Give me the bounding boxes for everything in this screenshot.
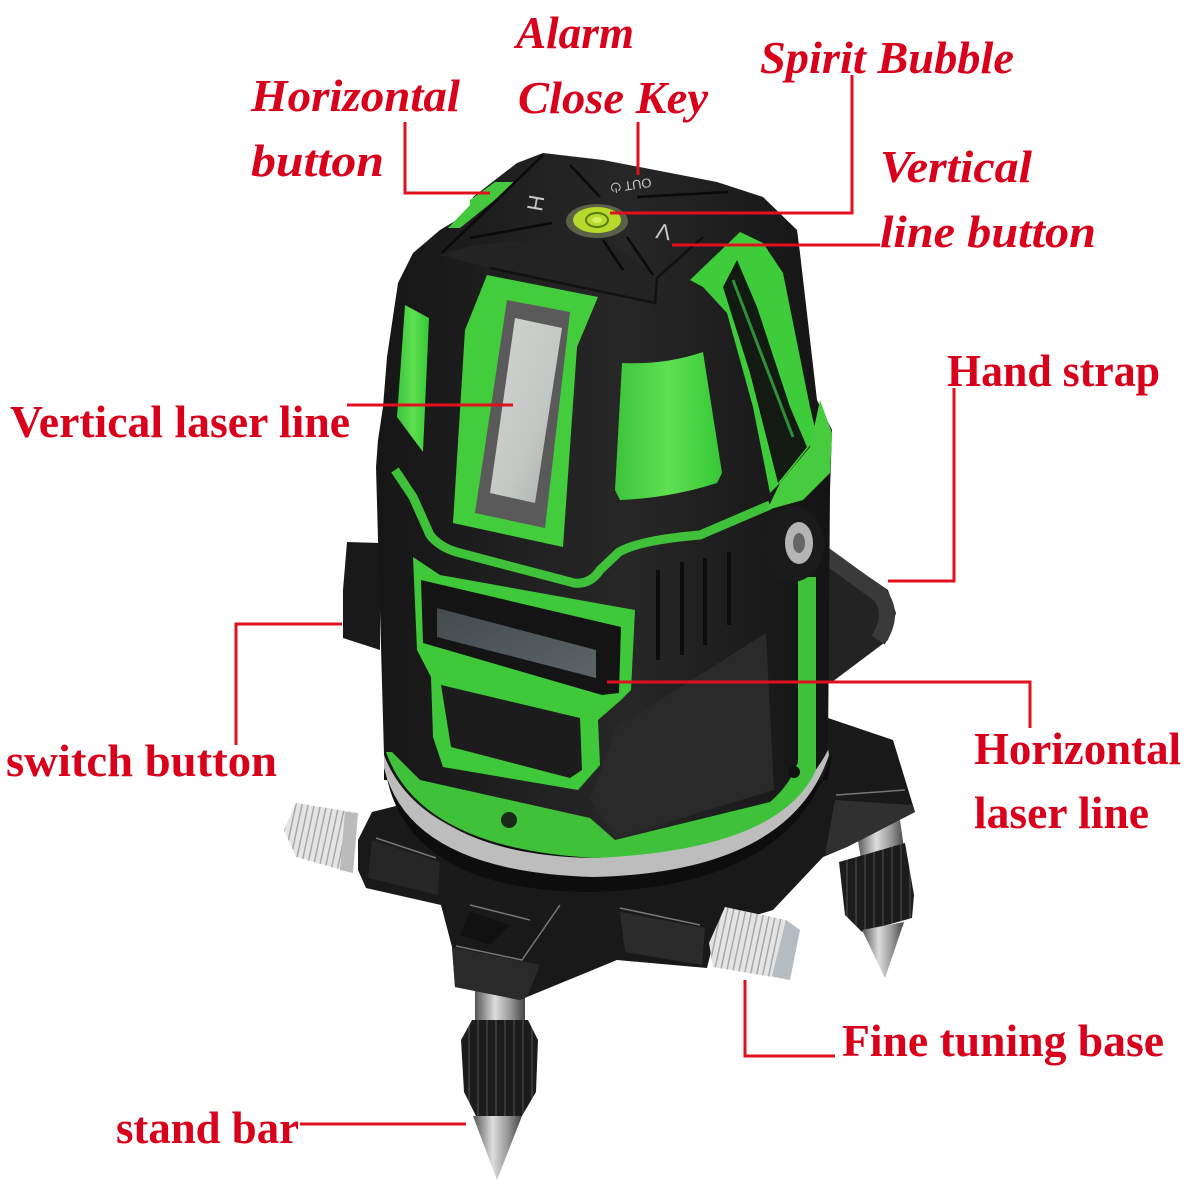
top cap detail	[440, 155, 728, 303]
leader lines	[236, 75, 1030, 1124]
label: alarm close key: Close Key	[518, 72, 709, 123]
switch knob	[343, 542, 380, 650]
label: fine tuning base: Fine tuning base	[842, 1015, 1164, 1066]
stand bar left	[461, 990, 538, 1180]
button H label: H	[522, 193, 549, 213]
right green panel	[615, 352, 722, 500]
green bottom band	[386, 577, 816, 858]
horizontal laser surround	[413, 557, 635, 790]
label: horizontal button: Horizontal	[250, 70, 460, 121]
label: horizontal laser line: Horizontal	[974, 723, 1181, 774]
hand strap	[815, 540, 896, 682]
housing screws	[501, 766, 800, 828]
ribs on lower housing	[658, 552, 729, 660]
horizontal laser glass	[437, 608, 596, 678]
stand bar right	[839, 820, 914, 978]
label: vertical line button	[880, 141, 1096, 257]
alarm key label: OUT ⏻	[610, 175, 652, 196]
laser level device	[284, 153, 915, 1180]
label: horizontal button	[250, 70, 460, 186]
green tab behind horizontal button	[448, 182, 517, 228]
body	[376, 153, 832, 857]
right side green window	[690, 232, 817, 493]
label: vertical laser line: Vertical laser line	[10, 396, 350, 447]
label: switch button: switch button	[6, 735, 277, 786]
fine tuning knob left	[284, 803, 358, 873]
label: vertical line button: line button	[880, 206, 1096, 257]
label: horizontal laser line: laser line	[974, 787, 1149, 838]
label: horizontal laser line	[974, 723, 1181, 838]
lower opening	[441, 685, 582, 778]
label: alarm close key: Alarm	[513, 7, 634, 58]
fine tuning base	[358, 718, 915, 1000]
base ring	[384, 735, 832, 892]
strap screw	[760, 506, 824, 582]
label: stand bar: stand bar	[116, 1102, 299, 1153]
label: horizontal button: button	[251, 135, 384, 186]
button V label: V	[654, 218, 673, 245]
horizontal laser window	[421, 580, 621, 695]
lower right panel	[590, 633, 774, 838]
label: hand strap: Hand strap	[947, 345, 1160, 396]
green waist line	[395, 470, 770, 583]
spirit bubble	[566, 204, 628, 238]
green shoulder band	[767, 400, 832, 510]
left green panel	[397, 305, 429, 452]
fine tuning knob right	[709, 907, 800, 980]
label: spirit bubble: Spirit Bubble	[760, 32, 1014, 83]
label: vertical line button: Vertical	[880, 141, 1032, 192]
vertical laser window	[453, 275, 598, 547]
label: alarm close key	[513, 7, 709, 123]
